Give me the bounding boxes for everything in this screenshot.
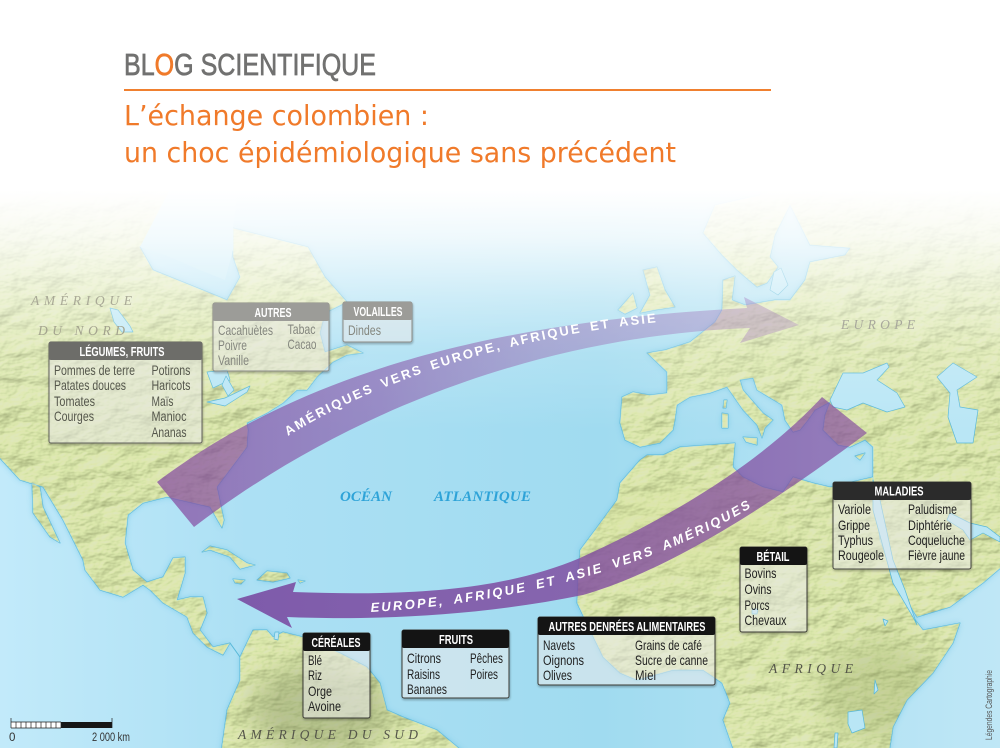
- panel: légumes, fruits: Manioc: [152, 408, 186, 424]
- panel: volailles: VOLAILLES: [354, 304, 403, 319]
- panel: légumes, fruits: Haricots: [152, 377, 190, 393]
- panel: légumes, fruits: Patates douces: [54, 377, 126, 393]
- panel: maladies: Rougeole: [838, 547, 884, 563]
- panel: maladies: Fièvre jaune: [908, 547, 965, 563]
- panel: maladies: Diphtérie: [908, 517, 952, 533]
- seas and lakes: [110, 170, 1000, 748]
- panel: fruits: Poires: [470, 666, 498, 682]
- panel: maladies: Paludisme: [908, 501, 957, 517]
- panel: maladies: [833, 482, 971, 569]
- scale bar: 2 000 km: [92, 732, 130, 744]
- panel: autres: Cacahuètes: [218, 322, 273, 338]
- panel: bétail: Bovins: [744, 565, 776, 581]
- panel: autres: AUTRES: [254, 305, 292, 320]
- panel: légumes, fruits: Potirons: [152, 362, 190, 378]
- panel: légumes, fruits: Maïs: [152, 393, 174, 409]
- panel: fruits: FRUITS: [439, 632, 473, 647]
- header rule: [124, 89, 771, 91]
- panel: céréales: Orge: [308, 683, 332, 699]
- panel: légumes, fruits: Tomates: [54, 393, 95, 409]
- panel: légumes, fruits: Pommes de terre: [54, 362, 135, 378]
- place labels: AMÉRIQUE: [30, 293, 133, 308]
- place labels: EUROPE: [840, 317, 916, 332]
- title: [124, 100, 676, 169]
- panel: céréales: Blé: [308, 652, 322, 668]
- panel: autres denrées alimentaires: Sucre de canne: [635, 652, 708, 668]
- place labels: [30, 293, 916, 742]
- panel: maladies: Variole: [838, 501, 871, 517]
- arrow: Europe, Africa, Asia to Americas: [237, 397, 867, 628]
- panel: volailles: Dindes: [348, 322, 381, 338]
- place labels: DU NORD: [37, 323, 125, 338]
- panel: autres: Vanille: [218, 352, 249, 368]
- panel: bétail: BÉTAIL: [756, 549, 790, 564]
- panel: bétail: [740, 547, 807, 632]
- panel: autres: Cacao: [288, 336, 317, 352]
- credit: Légendes Cartographie: [984, 670, 994, 740]
- panel: autres: Poivre: [218, 337, 247, 353]
- panel: céréales: Avoine: [308, 698, 341, 714]
- panel: céréales: Riz: [308, 667, 322, 683]
- panel: légumes, fruits: Ananas: [152, 424, 186, 440]
- panel: fruits: Citrons: [407, 650, 441, 666]
- panel: bétail: Porcs: [744, 597, 770, 613]
- panel: fruits: Pêches: [470, 650, 503, 666]
- place labels: OCÉAN: [340, 488, 393, 505]
- place labels: ATLANTIQUE: [433, 489, 531, 505]
- panel: céréales: [303, 633, 370, 718]
- scale bar: 0: [9, 732, 15, 744]
- panel: autres denrées alimentaires: AUTRES DENRÉES ALIMENTAIRES: [548, 619, 706, 634]
- panel: légumes, fruits: [49, 342, 202, 443]
- top fade to white: [0, 190, 1000, 430]
- panel: autres: [213, 303, 329, 371]
- panel: autres denrées alimentaires: Grains de café: [635, 637, 702, 653]
- map background: [0, 204, 1000, 748]
- panel: autres denrées alimentaires: Oignons: [543, 652, 584, 668]
- panel: maladies: MALADIES: [874, 484, 924, 498]
- panel: bétail: Ovins: [744, 581, 772, 597]
- arrow label: EUROPE, AFRIQUE ET ASIE VERS AMÉRIQUES: [371, 500, 750, 612]
- panel: maladies: Grippe: [838, 517, 870, 533]
- panel: légumes, fruits: LÉGUMES, FRUITS: [80, 344, 165, 359]
- arrow: Americas to Europe, Africa, Asia: [157, 297, 799, 527]
- place labels: AFRIQUE: [768, 661, 854, 676]
- panel: autres denrées alimentaires: [538, 617, 715, 685]
- panel: maladies: Coqueluche: [908, 532, 965, 548]
- panel: bétail: Chevaux: [744, 612, 786, 628]
- panel: légumes, fruits: Courges: [54, 408, 94, 424]
- panel: fruits: [402, 630, 509, 698]
- place labels: AMÉRIQUE DU SUD: [237, 727, 418, 742]
- panel: céréales: CÉRÉALES: [312, 635, 361, 650]
- panel: fruits: Bananes: [407, 681, 447, 697]
- panel: autres: Tabac: [288, 321, 316, 337]
- scale bar: [9, 718, 130, 744]
- logo: Blog Scientifique: BLOG SCIENTIFIQUE: [124, 47, 376, 82]
- panel: volailles: [343, 302, 412, 342]
- arrow label: AMÉRIQUES VERS EUROPE, AFRIQUE ET ASIE: [286, 314, 656, 436]
- panel: autres denrées alimentaires: Olives: [543, 667, 572, 683]
- title: un choc épidémiologique sans précédent: [124, 137, 676, 169]
- title: L’échange colombien :: [124, 100, 429, 132]
- panel: autres denrées alimentaires: Navets: [543, 637, 575, 653]
- panel: maladies: Typhus: [838, 532, 873, 548]
- panel: autres denrées alimentaires: Miel: [635, 667, 656, 683]
- panel: fruits: Raisins: [407, 666, 440, 682]
